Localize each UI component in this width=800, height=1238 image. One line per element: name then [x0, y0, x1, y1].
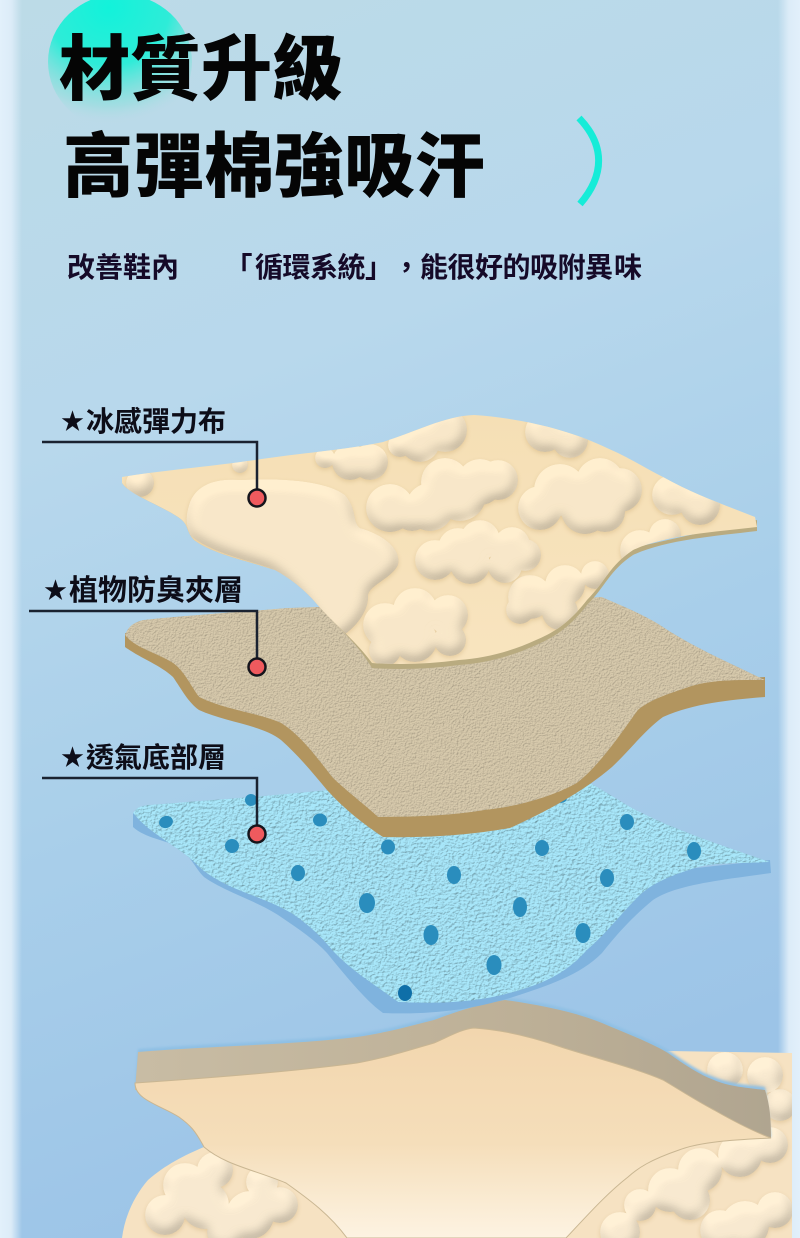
callout: plant deodorizing layer: ★ — [44, 577, 67, 603]
tan layer surface — [125, 597, 765, 817]
callout: ice-feel fabric: 冰感彈力布 — [86, 405, 226, 437]
layer 2: tan odor-proof layer — [125, 597, 765, 837]
callout: breathable base layer: 透氣底部層 — [86, 742, 226, 773]
cloud E — [394, 588, 434, 628]
cloud B — [418, 447, 463, 485]
blue layer holes — [157, 793, 701, 1001]
layer 4: cream sole with side strip — [135, 997, 771, 1238]
bottom insole with clouds — [110, 1040, 800, 1238]
callout: plant deodorizing layer — [29, 574, 266, 676]
callout: breathable base layer — [42, 742, 266, 842]
title — [59, 31, 485, 206]
title: 高彈棉強吸汗 — [63, 127, 485, 206]
subtitle: 改善鞋內 — [67, 252, 179, 283]
tan layer rim — [125, 633, 765, 837]
big left cloud — [186, 479, 399, 640]
subtitle: 「循環系統」，能很好的吸附異味 — [224, 252, 642, 283]
decorative teal arc — [579, 118, 599, 204]
blue layer surface — [133, 772, 770, 1003]
cloth rim — [122, 483, 757, 669]
upper clouds — [402, 426, 439, 465]
layer 1: ice-feel fabric with clouds — [122, 408, 757, 669]
title: 材質升級 — [59, 31, 343, 110]
cloth surface — [122, 415, 757, 664]
cloud D — [460, 520, 500, 560]
layer 3: blue perforated layer — [133, 772, 771, 1013]
callout: plant deodorizing layer: 植物防臭夾層 — [69, 574, 243, 607]
callout: ice-feel fabric — [42, 405, 266, 506]
cloud pattern — [126, 408, 720, 666]
callout: ice-feel fabric: ★ — [61, 408, 84, 434]
decorative teal circle — [48, 0, 192, 130]
cloud F — [508, 575, 552, 619]
blue layer rim — [133, 813, 771, 1013]
callout: breathable base layer: ★ — [61, 744, 84, 770]
cloud C — [534, 464, 586, 516]
